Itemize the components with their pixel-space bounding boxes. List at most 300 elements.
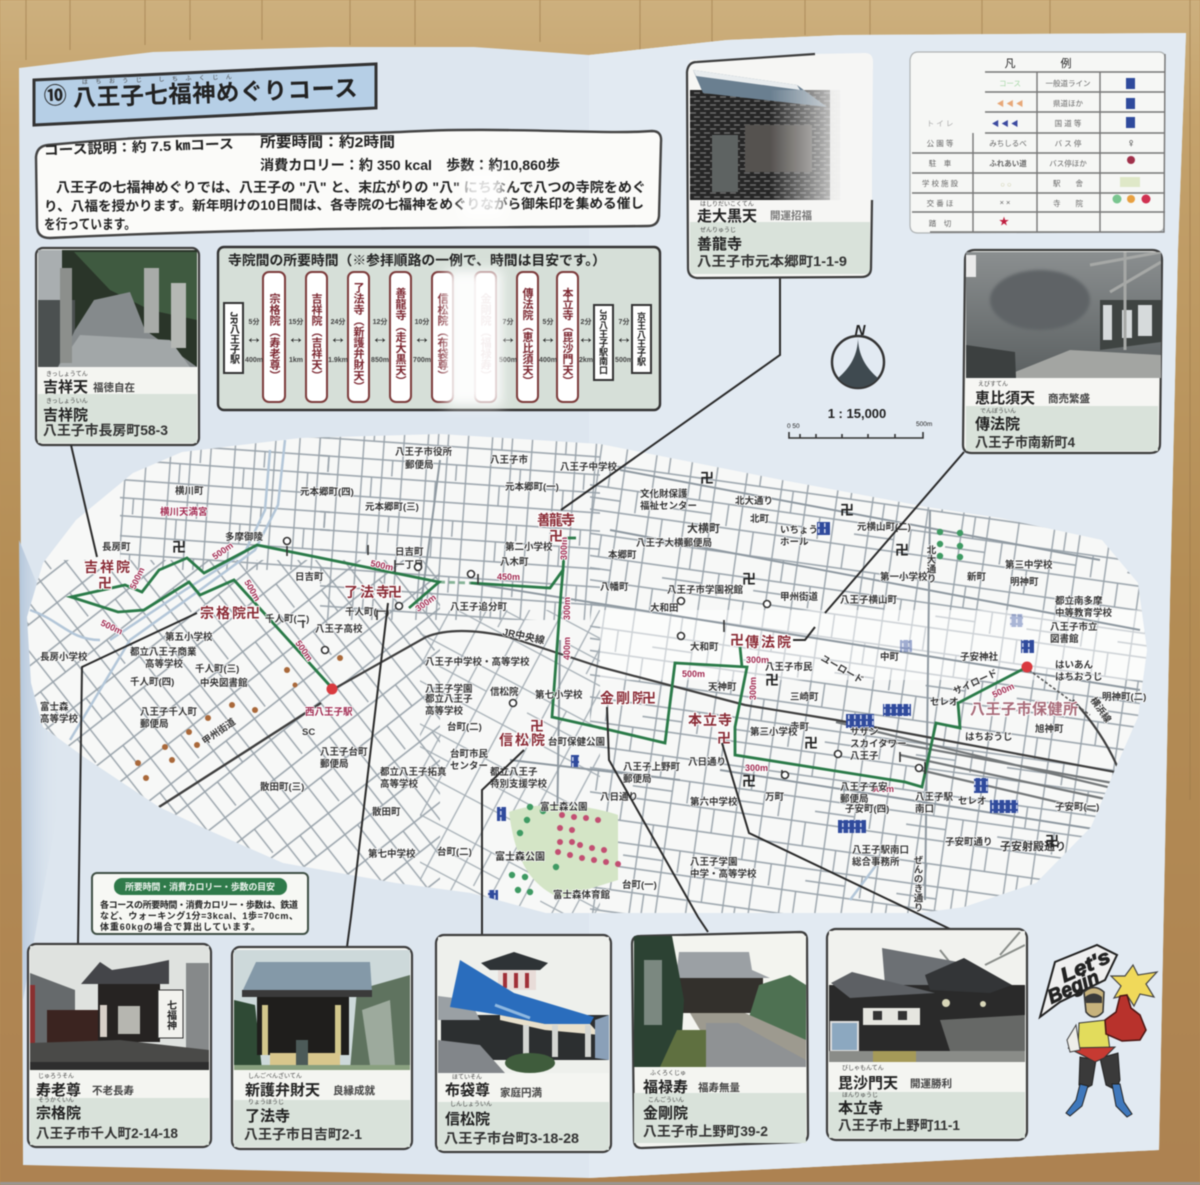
street and place labels: 西八王子駅 bbox=[305, 707, 353, 718]
main roads bbox=[420, 460, 1140, 900]
card: 信松院: しんしょういん bbox=[450, 1101, 492, 1108]
temple name labels on map: 卍 bbox=[246, 605, 260, 621]
course description box: を行っています。 bbox=[44, 217, 136, 232]
temple swastika and pin icons: 卍 bbox=[1045, 833, 1059, 849]
temple pills: 善龍寺（走大黒天） bbox=[394, 286, 406, 386]
street and place labels: 郵便局 bbox=[623, 773, 652, 785]
photo: 宗格院 gate bbox=[29, 945, 210, 1071]
street and place labels: 北大通り bbox=[735, 495, 773, 507]
street and place labels: ぜんのき通り bbox=[912, 855, 923, 912]
street and place labels: 八王子横山町 bbox=[840, 594, 898, 606]
distance labels on route: 500m bbox=[210, 540, 235, 562]
note header pill: 所要時間・消費カロリー・歩数の目安 bbox=[125, 881, 275, 892]
temple swastika and pin icons: 卍 bbox=[700, 470, 714, 486]
street and place labels: 子安神社 bbox=[960, 651, 999, 663]
street and place labels: 八王子大横郵便局 bbox=[636, 537, 712, 549]
street and place labels: 長房小学校 bbox=[40, 651, 88, 663]
distance labels on route: 300m bbox=[746, 655, 769, 665]
course description box: コース説明：約 7.5 ㎞コース bbox=[44, 135, 234, 158]
scale bar: 0 50 bbox=[787, 423, 800, 430]
leader line: 傳法院 bbox=[793, 452, 964, 640]
temple swastika and pin icons: 卍 bbox=[742, 571, 756, 587]
card: 宗格院: 宗格院 bbox=[36, 1104, 81, 1122]
street and place labels: 富士森体育館 bbox=[553, 889, 611, 901]
photo: 了法寺 gate bbox=[233, 950, 411, 1071]
legend symbols and labels: ◀ ◀ ◀ bbox=[997, 99, 1023, 108]
card: 宗格院 bbox=[28, 944, 211, 1147]
street and place labels: 八王子市民 bbox=[765, 661, 813, 673]
temple swastika and pin icons: 卍 bbox=[742, 773, 756, 789]
glare over folded crease bbox=[446, 172, 504, 406]
temple name labels on map: 善龍寺 bbox=[537, 512, 575, 528]
distance labels on route: 400m bbox=[562, 637, 572, 660]
card: 了法寺: しんごべんざいてん bbox=[248, 1072, 302, 1080]
arrows and times: ↔ bbox=[616, 328, 632, 347]
arrows and times: 7分 bbox=[619, 317, 629, 326]
street and place labels: 総合事務所 bbox=[852, 856, 900, 868]
street and place labels: 長房町 bbox=[102, 542, 131, 553]
street and place labels: はいあん bbox=[1055, 660, 1094, 671]
legend symbols and labels: 公 園 等 bbox=[927, 138, 954, 148]
card: 金剛院: 福禄寿 bbox=[643, 1078, 688, 1096]
street and place labels: 中等教育学校 bbox=[1055, 607, 1113, 619]
mascot: Let's Begin hero bbox=[1040, 945, 1157, 1117]
legend symbols and labels: 駅 舎 bbox=[1053, 179, 1083, 188]
arrows and times: 400m bbox=[245, 357, 263, 364]
temple name labels on map: 卍 bbox=[388, 584, 402, 600]
street and place labels: 散田町(三) bbox=[260, 781, 304, 793]
railway tracks bbox=[836, 722, 1150, 812]
street and place labels: 第六中学校 bbox=[690, 796, 738, 808]
leader line: 信松院 bbox=[482, 750, 524, 935]
street and place labels: 八王子中学校 bbox=[560, 461, 618, 473]
card: 本立寺 bbox=[827, 929, 1027, 1140]
street and place labels: 子安町通り bbox=[945, 836, 993, 848]
temple pills bbox=[263, 272, 578, 402]
park trees bbox=[555, 812, 621, 867]
street and place labels: 第七小学校 bbox=[535, 689, 583, 701]
temple name labels on map: 傳法院 bbox=[745, 634, 791, 650]
street and place labels: 台町(一) bbox=[622, 879, 657, 891]
street and place labels: 中学・高等学校 bbox=[690, 868, 757, 880]
card: 傳法院: 傳法院 bbox=[975, 415, 1020, 433]
street and place labels: 千人町(一) bbox=[345, 606, 389, 618]
temple name labels on map: 卍 bbox=[717, 730, 731, 746]
street and place labels: 明神町(二) bbox=[1102, 691, 1146, 703]
title banner bbox=[34, 64, 376, 125]
distance labels on route: 300m bbox=[413, 592, 438, 614]
legend symbols and labels: ♀ bbox=[1126, 136, 1136, 150]
legend table: 凡 bbox=[1004, 58, 1016, 70]
card: 宗格院: 不老長寿 bbox=[92, 1084, 134, 1097]
card: 吉祥院 bbox=[36, 248, 199, 445]
street and place labels: セレオ bbox=[958, 796, 987, 807]
card: 傳法院 bbox=[963, 250, 1162, 453]
street and place labels: 南口 bbox=[915, 803, 934, 815]
photo: 本立寺 hall bbox=[828, 930, 1026, 1063]
card: 信松院: 布袋尊 bbox=[445, 1081, 490, 1099]
leader line: 善龍寺 bbox=[561, 277, 780, 510]
street and place labels: 八木町 bbox=[500, 556, 529, 568]
street and place labels: 第三中学校 bbox=[1005, 559, 1053, 571]
street and place labels: セレオ bbox=[930, 697, 959, 708]
red pointing fist bbox=[1105, 995, 1146, 1041]
temple name labels on map: 信松院 bbox=[499, 732, 545, 748]
street and place labels: 台町(二) bbox=[447, 721, 482, 733]
street and place labels: 元本郷町(一) bbox=[505, 481, 559, 493]
street and place labels: 元横山町(二) bbox=[857, 521, 911, 533]
temple swastika and pin icons: 卍 bbox=[840, 502, 854, 518]
card: 了法寺: 良縁成就 bbox=[333, 1084, 375, 1097]
street and place labels: 第七中学校 bbox=[368, 848, 416, 860]
street and place labels: 子安射殿通り bbox=[1000, 839, 1066, 853]
street and place labels: 北大通り bbox=[924, 544, 936, 583]
scale bar: 500m bbox=[916, 421, 932, 428]
legend symbols and labels: × × bbox=[1000, 198, 1010, 207]
legend symbols and labels: 寺 院 bbox=[1053, 199, 1083, 208]
bus station icons bbox=[488, 522, 1034, 904]
card: 了法寺 bbox=[232, 947, 412, 1149]
street and place labels: 高等学校 bbox=[425, 705, 464, 717]
street and place labels: 八王子市学園祝館 bbox=[667, 584, 744, 596]
card: 金剛院: 金剛院 bbox=[643, 1104, 688, 1122]
street and place labels: 高等学校 bbox=[380, 778, 419, 790]
street and place labels: 元本郷町(四) bbox=[300, 486, 354, 498]
legend symbols and labels: ◀ ◀ ◀ bbox=[992, 119, 1018, 128]
street and place labels: 台町保健公園 bbox=[548, 736, 605, 748]
card: 信松院: 信松院 bbox=[445, 1111, 490, 1128]
card: 吉祥院: 吉祥天 bbox=[43, 379, 88, 396]
temple pills: 金剛院（福禄寿） bbox=[479, 292, 492, 381]
burst star bbox=[1111, 965, 1157, 1006]
arrows and times: ↔ bbox=[330, 328, 346, 347]
JR chuo line bbox=[332, 631, 1120, 773]
card: 傳法院: 商売繁盛 bbox=[1048, 392, 1090, 405]
card: 善龍寺: 八王子市元本郷町1-1-9 bbox=[697, 253, 847, 269]
temple swastika and pin icons: 卍 bbox=[172, 539, 186, 555]
street and place labels: 千人町(四) bbox=[130, 676, 174, 688]
arrows and times: ↔ bbox=[540, 328, 556, 347]
photo: 信松院 blue roof bbox=[437, 936, 610, 1074]
street and place labels: 八王子学園 bbox=[690, 856, 738, 868]
street and place labels: 八王子市 bbox=[490, 454, 529, 466]
street and place labels: 八日通り bbox=[688, 757, 726, 768]
card: 傳法院: 恵比須天 bbox=[975, 389, 1035, 407]
temple pills: 傳法院（恵比須天） bbox=[521, 286, 534, 386]
legend symbols and labels: 交 番 ほ bbox=[927, 198, 954, 208]
card: 宗格院: じゅろうそん bbox=[38, 1073, 74, 1080]
street and place labels: 元本郷町(三) bbox=[365, 501, 419, 513]
photo: 宗格院 gate: 七福神 bbox=[164, 1000, 176, 1031]
street and place labels: 図書館 bbox=[1050, 633, 1079, 645]
card: 金剛院: 八王子市上野町39-2 bbox=[643, 1123, 768, 1139]
arrows and times: 2km bbox=[579, 357, 593, 364]
arrows and times: ↔ bbox=[500, 328, 516, 347]
street and place labels: はちおうじ bbox=[965, 732, 1013, 743]
arrows and times bbox=[245, 317, 633, 364]
street and place labels: サイロード bbox=[952, 668, 999, 698]
arrows and times: ↔ bbox=[288, 328, 304, 347]
legend symbols and labels: ○ ○ bbox=[1000, 180, 1012, 189]
heading: travel times: 寺院間の所要時間（※参拝順路の一例で、時間は目安です。） bbox=[228, 252, 606, 268]
temple name labels on map: 卍 bbox=[549, 528, 563, 544]
legend symbols and labels: バ ス 停 bbox=[1055, 138, 1082, 148]
street and place labels: 三崎町 bbox=[790, 691, 819, 703]
street and place labels: 八王子子安 bbox=[840, 781, 888, 793]
street and place labels: 八王子追分町 bbox=[450, 601, 508, 613]
hero torso bbox=[1078, 1020, 1110, 1051]
card: 了法寺: 新護弁財天 bbox=[245, 1081, 320, 1099]
street and place labels: 本郷町 bbox=[608, 549, 637, 561]
card: 本立寺: 本立寺 bbox=[838, 1100, 883, 1117]
arrows and times: 2分 bbox=[581, 317, 591, 326]
station boxes: JR八王子駅南口 bbox=[598, 309, 608, 375]
temple name labels on map: 卍 bbox=[730, 632, 744, 648]
street and place labels: 富士森公園 bbox=[495, 850, 545, 863]
card: 吉祥院: きっしょうてん bbox=[46, 371, 88, 378]
temple swastika and pin icons: 卍 bbox=[765, 672, 779, 688]
card: 本立寺: びしゃもんてん bbox=[842, 1064, 884, 1072]
street and place labels: 千人町(二) bbox=[265, 613, 309, 625]
speech banner: Let's bbox=[1057, 946, 1114, 987]
distance labels on route: 500m bbox=[871, 784, 894, 794]
card: 吉祥院: 福徳自在 bbox=[93, 381, 135, 394]
note header pill bbox=[114, 878, 287, 895]
street and place labels: いちょう bbox=[780, 525, 818, 536]
card: 本立寺: ほんりゅうじ bbox=[842, 1092, 878, 1099]
distance labels on route: 300m bbox=[562, 597, 572, 620]
note box: time and calorie notes: 体重60kgの場合で算出しています。 bbox=[100, 921, 260, 932]
ginkgo dots bbox=[135, 655, 343, 781]
street and place labels: 大横町 bbox=[687, 521, 720, 535]
street and place labels: 富士森 bbox=[40, 701, 69, 713]
card: 傳法院: でんぼういん bbox=[980, 408, 1016, 415]
card: 善龍寺: 善龍寺 bbox=[697, 235, 742, 253]
note box: time and calorie notes bbox=[92, 873, 308, 934]
temple pills: 吉祥院（吉祥天） bbox=[310, 292, 322, 381]
card: 吉祥院: 吉祥院 bbox=[43, 407, 88, 424]
street and place labels: 台町市民 bbox=[450, 748, 489, 760]
arrows and times: 1km bbox=[289, 357, 303, 364]
street and place labels: 郵便局 bbox=[140, 718, 169, 730]
street and place labels: 八王子高校 bbox=[315, 623, 363, 635]
legend symbols and labels: 県道ほか bbox=[1053, 98, 1083, 108]
title banner: はちおうじ しちふくじん bbox=[82, 74, 232, 86]
street and place labels: 横川天満宮 bbox=[160, 506, 208, 518]
speech banner: Begin bbox=[1044, 966, 1103, 1009]
street and place labels: 高等学校 bbox=[40, 713, 79, 725]
street and place labels: 明神町 bbox=[1010, 576, 1039, 588]
card: 善龍寺: ぜんりゅうじ bbox=[700, 227, 736, 234]
temple pills: 了法寺（新護弁財天） bbox=[352, 282, 364, 392]
course description box: 消費カロリー：約 350 kcal 歩数：約10,860歩 bbox=[260, 157, 560, 173]
street and place labels: 中央図書館 bbox=[200, 677, 248, 689]
distance labels on route: 500m bbox=[242, 578, 262, 603]
card: 傳法院: 八王子市南新町4 bbox=[975, 434, 1075, 450]
street and place labels: 八王子上野町 bbox=[623, 761, 681, 773]
panel: travel times between temples bbox=[218, 247, 660, 410]
street and place labels: 八幡町 bbox=[600, 581, 629, 593]
scale bar bbox=[787, 421, 932, 438]
street and place labels: 富士森公園 bbox=[540, 801, 588, 813]
map bbox=[26, 434, 1147, 914]
arrows and times: 500m bbox=[615, 357, 633, 364]
station boxes: JR八王子駅 bbox=[228, 312, 240, 365]
arrows and times: 400m bbox=[539, 357, 557, 364]
card: 了法寺: りょうほうじ bbox=[248, 1099, 284, 1106]
street and place labels: 八王子駅南口 bbox=[852, 844, 909, 856]
street and place labels: JR中央線 bbox=[501, 625, 546, 647]
street and place labels: 大和町 bbox=[690, 641, 719, 653]
street and place labels: ホール bbox=[780, 537, 809, 548]
photo: 金剛院 hall bbox=[633, 935, 807, 1068]
koshu kaido dark road bbox=[159, 703, 321, 807]
street and place labels: 第五小学校 bbox=[165, 631, 213, 643]
leader line: 吉祥院 bbox=[71, 445, 97, 557]
distance labels on route: 500m bbox=[293, 638, 315, 663]
street and place labels: 多摩御陵 bbox=[225, 531, 264, 543]
distance labels on route: 300m bbox=[559, 537, 569, 560]
hero arm bbox=[1067, 1025, 1080, 1052]
card: 宗格院: そうかくいん bbox=[38, 1097, 74, 1104]
card: 本立寺: 八王子市上野町11-1 bbox=[838, 1117, 960, 1133]
street and place labels: 寺町 bbox=[790, 721, 810, 733]
card: 善龍寺: 走大黒天 bbox=[697, 207, 757, 225]
legend symbols and labels: 駐 車 bbox=[929, 158, 952, 168]
street and place labels: 高等学校 bbox=[145, 658, 184, 670]
legend symbols and labels: 踏 切 bbox=[929, 218, 952, 228]
temple name labels on map: 卍 bbox=[98, 575, 112, 591]
card: 信松院: 八王子市台町3-18-28 bbox=[444, 1130, 580, 1146]
street and place labels: 子安町(一) bbox=[1055, 801, 1099, 813]
note box: time and calorie notes: 各コースの所要時間・消費カロリー・歩数は、鉄道 bbox=[100, 899, 298, 910]
legend table: 例 bbox=[1060, 56, 1072, 70]
arrows and times: 15分 bbox=[289, 317, 303, 326]
rivers bbox=[70, 440, 285, 740]
leader line: 金剛院 bbox=[607, 707, 708, 932]
street and place labels: 第二小学校 bbox=[505, 541, 553, 553]
card: 金剛院: ふくろくじゅ bbox=[650, 1070, 686, 1077]
leader line: 本立寺 bbox=[722, 743, 950, 929]
street and place labels: 新町 bbox=[967, 571, 986, 583]
speech banner bbox=[1040, 945, 1117, 1017]
arrows and times: 850m bbox=[371, 357, 389, 364]
card: 金剛院: 福寿無量 bbox=[698, 1081, 740, 1094]
street and place labels: 甲州街道 bbox=[200, 716, 238, 747]
card: 宗格院: 八王子市千人町2-14-18 bbox=[36, 1125, 178, 1141]
street and place labels: 旭神町 bbox=[1035, 723, 1064, 735]
street and place labels: 都立八王子商業 bbox=[130, 646, 197, 658]
street and place labels: 横川町 bbox=[175, 485, 204, 497]
arrows and times: 7分 bbox=[503, 317, 513, 326]
card: 善龍寺: 開運招福 bbox=[770, 209, 812, 222]
street and place labels: 第三小学校 bbox=[750, 726, 798, 738]
temple name labels on map: 卍 bbox=[642, 690, 656, 706]
street and place labels: はちおうじ bbox=[1055, 672, 1103, 683]
arrows and times: 10分 bbox=[415, 317, 429, 326]
station boxes: 京王八王子駅 bbox=[636, 311, 646, 367]
street and place labels: 都立八王子 bbox=[490, 766, 538, 778]
hero head bbox=[1084, 988, 1104, 1017]
card: 本立寺: 毘沙門天 bbox=[838, 1075, 898, 1092]
street and place labels: 都立八王子拓真 bbox=[380, 766, 447, 778]
temple swastika and pin icons: 卍 bbox=[895, 542, 909, 558]
street and place labels: 八王子市立 bbox=[1050, 621, 1098, 633]
legend symbols and labels: コース bbox=[999, 79, 1021, 88]
distance labels on route: 500m bbox=[991, 681, 1016, 700]
street and place labels: サザン bbox=[850, 727, 879, 738]
arrows and times: 5分 bbox=[543, 317, 553, 326]
title banner: 八王子七福神めぐりコース bbox=[72, 75, 358, 111]
leader line: 了法寺 bbox=[347, 603, 388, 947]
street and place labels: 横浜線 bbox=[1088, 695, 1114, 725]
card: 了法寺: 了法寺 bbox=[245, 1107, 290, 1125]
street and place labels: 散田町 bbox=[372, 806, 401, 818]
arrows and times: 24分 bbox=[331, 317, 345, 326]
street and place labels: センター bbox=[450, 760, 488, 772]
temple pills: 宗格院（寿老尊） bbox=[268, 292, 280, 381]
legend symbols and labels: みちしるべ bbox=[989, 139, 1027, 148]
photo: 善龍寺 hall bbox=[689, 60, 832, 201]
street and place labels: 一丁目 bbox=[395, 560, 424, 571]
street and place labels: 北町 bbox=[750, 513, 770, 525]
temple name labels on map: 吉祥院 bbox=[84, 559, 130, 575]
street and place labels: 甲州街道 bbox=[780, 591, 819, 603]
street and place labels: 郵便局 bbox=[320, 758, 349, 770]
compass bbox=[832, 322, 884, 388]
street and place labels bbox=[40, 446, 1146, 912]
street and place labels: 都立南多摩 bbox=[1055, 595, 1103, 607]
title banner: ⑩ bbox=[43, 82, 67, 109]
street and place labels: 都立八王子 bbox=[425, 693, 473, 705]
compass: N bbox=[855, 322, 867, 339]
street and place labels: 福祉センター bbox=[640, 500, 697, 512]
street and place labels: 台町(二) bbox=[437, 846, 472, 858]
temple pills: 信松院（布袋尊） bbox=[436, 292, 448, 381]
legend symbols and labels: 一般道ライン bbox=[1046, 78, 1090, 88]
distance labels on route: 500m bbox=[128, 566, 147, 591]
course description box: 八王子の七福神めぐりでは、八王子の "八" と、末広がりの "八" にちなんで八つの寺院をめぐ bbox=[56, 179, 646, 195]
hero boots bbox=[1066, 1084, 1132, 1117]
card: 了法寺: 八王子市日吉町2-1 bbox=[244, 1126, 363, 1142]
street and place labels: 特別支援学校 bbox=[490, 778, 548, 790]
arrows and times: 1.9km bbox=[328, 357, 348, 364]
street and place labels: 郵便局 bbox=[840, 793, 869, 805]
legend table bbox=[910, 52, 1165, 233]
street and place labels: SC bbox=[302, 727, 315, 738]
street and place labels: 八王子中学校・高等学校 bbox=[425, 656, 530, 668]
card: 吉祥院: きっしょういん bbox=[46, 398, 88, 405]
card: 善龍寺: はしりだいこくてん bbox=[700, 201, 754, 208]
legend symbols and labels: 国 道 等 bbox=[1055, 118, 1082, 128]
distance labels on route bbox=[99, 537, 1016, 794]
street and place labels: 千人町(三) bbox=[195, 663, 239, 675]
card: 信松院: 家庭円満 bbox=[500, 1086, 542, 1099]
street and place labels: スカイタワー bbox=[850, 738, 907, 750]
temple name labels on map: 卍 bbox=[530, 718, 544, 734]
street and place labels: 子安町(四) bbox=[845, 803, 889, 815]
legend symbols and labels bbox=[922, 78, 1150, 228]
street and place labels: 八王子学園 bbox=[425, 683, 473, 695]
course description box: 所要時間：約2時間 bbox=[260, 134, 395, 150]
station boxes bbox=[224, 303, 651, 380]
distance labels on route: 500m bbox=[682, 669, 705, 679]
street and place labels: 信松院 bbox=[490, 686, 519, 698]
street and place labels: 天神町 bbox=[708, 681, 737, 693]
arrows and times: 500m bbox=[499, 357, 517, 364]
distance labels on route: 500m bbox=[99, 618, 124, 637]
park bbox=[509, 805, 618, 898]
